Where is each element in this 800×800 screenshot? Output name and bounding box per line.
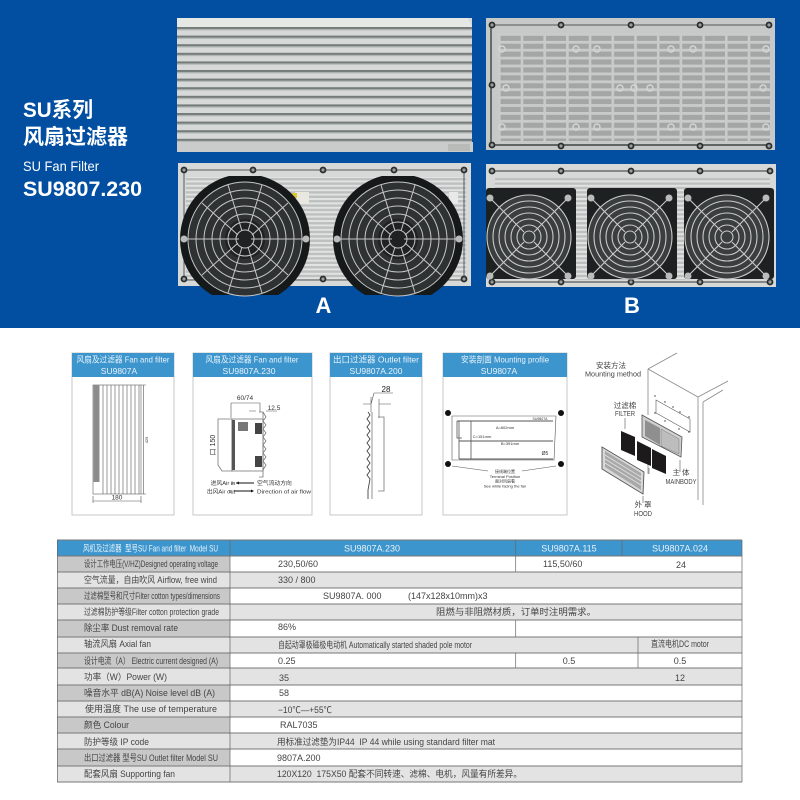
blue banner — [0, 0, 800, 328]
drawing: mounting cutout: Ø5 — [542, 451, 549, 457]
table header: SU9807A.230 — [344, 544, 400, 554]
drawing: mounting cutout — [445, 410, 564, 488]
mounting method diagram: MAINBODY — [666, 477, 696, 486]
row values: 用标准过滤垫为IP44 IP 44 while using standard filter mat — [277, 736, 495, 747]
banner title: 风扇过滤器 — [23, 125, 128, 149]
drawing: mounting cutout: 接线端位置 — [495, 468, 515, 474]
drawing: mounting cutout: 面对风扇看 — [495, 478, 515, 484]
drawing: side view: 进风Air in — [211, 479, 235, 487]
row values — [277, 559, 709, 779]
drawing: side view: 空气流动方向 — [257, 479, 292, 487]
row labels: 使用温度 The use of temperature — [85, 703, 217, 714]
row values: 230,50/60 — [278, 559, 318, 569]
row values: 12 — [675, 673, 685, 683]
panel: fan and filter SU9807A.230: SU9807A.230 — [223, 366, 276, 376]
row values: 58 — [279, 688, 289, 698]
row values: 120X120 175X50 配套不同转速、滤棉、电机，风量有所差异。 — [277, 768, 522, 779]
row values: 330 / 800 — [278, 575, 316, 585]
mounting method diagram: FILTER — [615, 409, 635, 418]
row values: 0.5 — [563, 656, 575, 666]
table header — [57, 540, 742, 556]
row labels: 轴流风扇 Axial fan — [84, 638, 151, 649]
panel: fan and filter SU9807A: 风扇及过滤器 Fan and filter — [76, 354, 170, 364]
row labels: 噪音水平 dB(A) Noise level dB (A) — [84, 687, 215, 698]
panel: mounting profile: SU9807A — [481, 366, 518, 376]
drawing: side view: 60/74 — [237, 395, 254, 402]
panel: fan and filter SU9807A — [72, 353, 174, 515]
panel: mounting profile — [443, 353, 567, 515]
table row backgrounds — [57, 556, 742, 782]
drawing: front view: 180 — [112, 494, 123, 502]
row values: 35 — [279, 673, 289, 683]
row values: −10℃—+55℃ — [278, 705, 332, 715]
drawing: outlet profile: 28 — [382, 385, 391, 394]
drawing: front view — [93, 385, 149, 503]
row labels: 颜色 Colour — [84, 719, 129, 730]
row labels: 过滤棉型号和尺寸Filter cotton types/dimensions — [84, 590, 220, 601]
drawing: side view: Direction of air flow — [257, 490, 312, 496]
photo: model B with three fans — [486, 164, 776, 287]
row labels: 空气流量，自由吹风 Airflow, free wind — [84, 574, 217, 585]
panel: outlet filter: SU9807A.200 — [350, 366, 403, 376]
drawing: mounting cutout: See while facing the fan — [484, 484, 526, 488]
row values: 9807A.200 — [277, 753, 321, 763]
row labels: 出口过滤器 型号SU Outlet filter Model SU — [84, 752, 218, 763]
panel: mounting profile: 安装剖面 Mounting profile — [461, 354, 549, 364]
drawing: side view: A — [231, 480, 234, 486]
row values: 0.5 — [674, 656, 686, 666]
row values: 115,50/60 — [543, 559, 582, 569]
table header: 风机及过滤器 型号SU Fan and filter Model SU — [83, 542, 218, 554]
drawing: mounting cutout: C=151mm — [473, 434, 492, 439]
drawing: mounting cutout: Terminal Position — [490, 474, 520, 479]
row values: RAL7035 — [280, 720, 318, 730]
row values: (147x128x10mm)x3 — [408, 591, 488, 601]
row labels — [84, 558, 220, 779]
drawing: side view: 出风Air out — [207, 488, 236, 496]
row labels: 配套风扇 Supporting fan — [84, 768, 175, 779]
mounting method diagram: 过滤棉 — [614, 400, 636, 410]
drawing: side view: 12.5 — [268, 405, 281, 412]
drawing: mounting cutout: A=602mm — [496, 425, 515, 430]
banner title — [23, 99, 142, 201]
row labels: 功率（W）Power (W) — [84, 671, 167, 682]
drawing: mounting cutout: B=391mm — [501, 441, 520, 446]
gasket — [654, 395, 690, 433]
row labels: 设计电流（A） Electric current designed (A) — [84, 655, 218, 666]
row values: 自起动罩极磁极电动机 Automatically started shaded pole motor — [278, 639, 472, 650]
row values: 86% — [278, 622, 296, 632]
mounting method diagram: 安装方法 — [596, 360, 626, 370]
mounting method diagram — [585, 353, 728, 518]
photo: louvre back — [486, 18, 775, 150]
panel: outlet filter — [330, 353, 422, 515]
row values: 阻燃与非阻燃材质，订单时注明需求。 — [436, 606, 596, 617]
banner title: SU Fan Filter — [23, 158, 99, 174]
row values: 直流电机DC motor — [651, 638, 709, 649]
row labels: 除尘率 Dust removal rate — [84, 622, 178, 633]
mounting method diagram: 外 罩 — [634, 499, 652, 509]
label B: B — [624, 293, 640, 318]
row values: 24 — [676, 560, 686, 570]
label A: A — [316, 293, 332, 318]
row labels: 防护等级 IP code — [84, 736, 149, 747]
drawing: side view: B — [229, 489, 232, 494]
filters — [621, 431, 666, 474]
mounting method diagram: Mounting method — [585, 370, 641, 378]
mounting method diagram: 主 体 — [672, 467, 690, 477]
row values: SU9807A. 000 — [323, 591, 382, 601]
drawing: mounting cutout: SU9807A — [533, 417, 548, 421]
panel: fan and filter SU9807A.230: 风扇及过滤器 Fan and filter — [206, 354, 299, 364]
photo: louvre front — [177, 18, 473, 152]
specification table — [57, 540, 742, 782]
hood — [602, 447, 644, 494]
row values: 0.25 — [278, 656, 296, 666]
table header: SU9807A.115 — [541, 544, 597, 554]
main body — [642, 415, 682, 457]
panel: fan and filter SU9807A: SU9807A — [101, 366, 138, 376]
banner title: SU系列 — [23, 99, 93, 122]
photo: model A with two fans — [178, 163, 471, 304]
panel: outlet filter: 出口过滤器 Outlet filter — [333, 354, 419, 364]
drawing: front view: 429 — [144, 436, 149, 443]
row labels: 过滤棉防护等级Filter cotton protection grade — [84, 606, 219, 617]
panel: fan and filter SU9807A.230 — [193, 353, 312, 515]
banner title: SU9807.230 — [23, 178, 142, 201]
cabinet outline — [648, 353, 728, 505]
row labels: 设计工作电压(V/HZ)Designed operating voltage — [84, 558, 218, 569]
drawing: outlet profile — [363, 385, 393, 499]
drawing: side view: 口 150 — [209, 435, 217, 455]
drawing: side view — [207, 395, 312, 496]
table header: SU9807A.024 — [652, 544, 708, 554]
mounting method diagram: HOOD — [634, 509, 652, 518]
